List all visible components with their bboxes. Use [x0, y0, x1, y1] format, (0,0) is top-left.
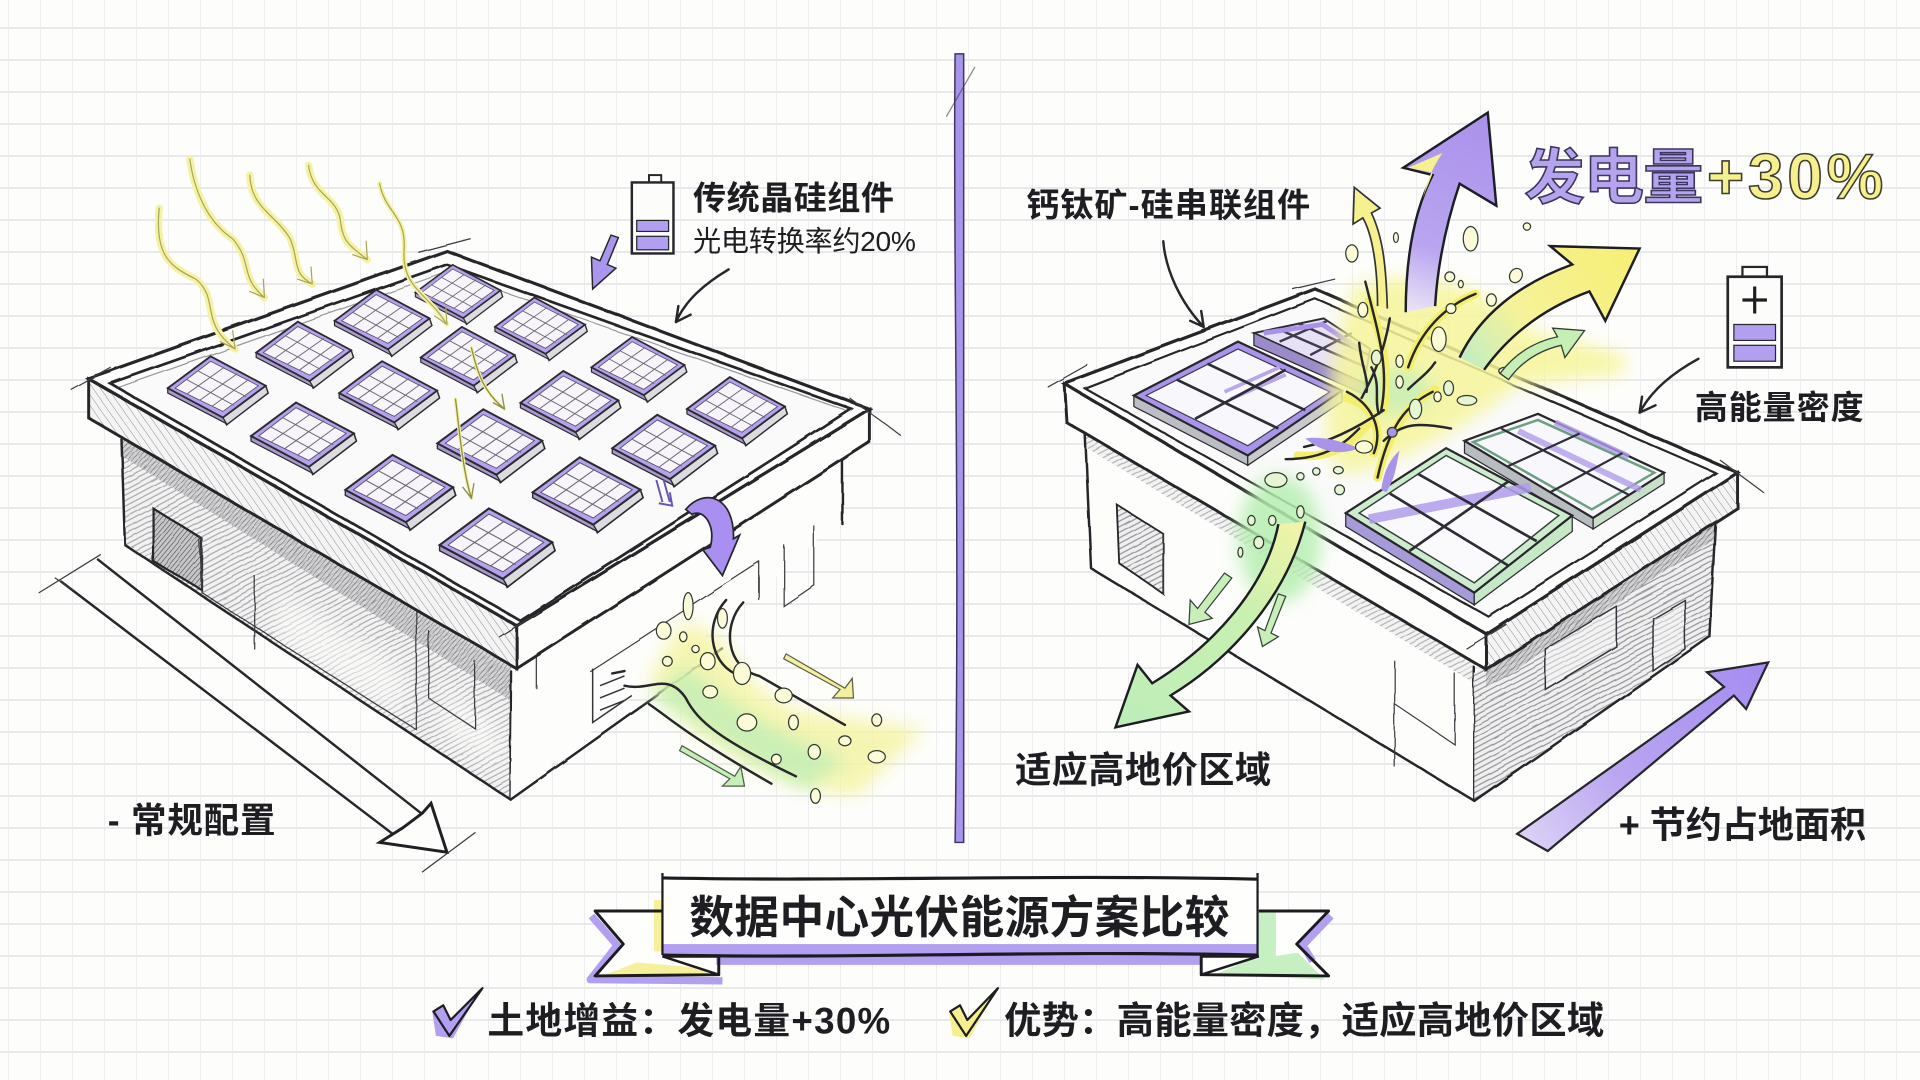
right wall	[511, 456, 842, 800]
text: conversion rate: 光电转换率约20%	[693, 226, 916, 257]
tandem panel: back left	[1254, 318, 1370, 394]
callout: power output plus thirty percent: +30%	[1707, 141, 1883, 212]
icon: small purple arrow pointing to roof	[591, 235, 618, 289]
arrow: purple land-saving	[1517, 662, 1768, 851]
right building: tandem rooftop	[1048, 279, 1763, 801]
text: advantages: 优势：高能量密度，适应高地价区域	[1004, 999, 1604, 1041]
icon: thin callout arrow to tandem panel	[1163, 241, 1204, 327]
icon: purple checkmark	[432, 988, 482, 1038]
right wall with hatching	[1474, 520, 1716, 801]
heading: tandem module: 钙钛矿-硅串联组件	[1026, 188, 1310, 225]
roof slab	[71, 239, 900, 669]
tandem panel: front right	[1346, 448, 1572, 605]
icon: yellow checkmark	[949, 988, 998, 1038]
heading: conventional module: 传统晶硅组件	[693, 180, 894, 217]
banner: ribbon tails	[595, 911, 1329, 976]
text: land gain: 土地增益：发电量+30%	[487, 1000, 890, 1041]
solar panel array, sixteen tilted modules	[168, 265, 787, 587]
banner: main ribbon	[662, 873, 1258, 956]
label: high energy density: 高能量密度	[1695, 390, 1864, 427]
banner: title text: 数据中心光伏能源方案比较	[689, 894, 1229, 943]
icon: curved purple arrow over roof edge	[686, 498, 740, 576]
icon: thin callout arrow	[676, 269, 729, 322]
label: saves land footprint: + 节约占地面积	[1619, 805, 1866, 846]
battery icon: high charge	[1728, 267, 1782, 367]
label: high land value regions: 适应高地价区域	[1015, 749, 1271, 790]
arrow: down-left green	[1116, 522, 1305, 727]
banner: colour wash behind ribbon	[590, 900, 1331, 981]
icon: thin callout arrow to roof	[1640, 359, 1698, 413]
title banner	[590, 873, 1331, 981]
left building: conventional silicon rooftop	[71, 239, 900, 800]
battery icon: low charge	[632, 175, 673, 253]
wavy yellow sunlight arrows	[158, 159, 504, 498]
arrow: up purple	[1403, 113, 1496, 312]
dimension arrow: conventional footprint	[39, 555, 475, 872]
energy stream leaving left building	[593, 593, 924, 803]
icon: small purple arrows	[656, 480, 672, 506]
divider: purple centre line	[947, 54, 975, 842]
callout: power output plus thirty percent: 发电量	[1524, 144, 1703, 211]
arrow: small yellow up	[1353, 187, 1387, 309]
roof slab	[1048, 279, 1763, 670]
energy burst on right roof	[1189, 223, 1626, 647]
tandem panel: right rear	[1464, 414, 1664, 529]
tandem panel: front left	[1134, 342, 1342, 465]
label: conventional configuration: - 常规配置	[108, 801, 276, 841]
arrow: right yellow	[1460, 246, 1640, 370]
left wall	[1085, 429, 1474, 801]
left wall with hatching	[121, 422, 511, 800]
callout: power output plus thirty percent	[1524, 141, 1883, 212]
